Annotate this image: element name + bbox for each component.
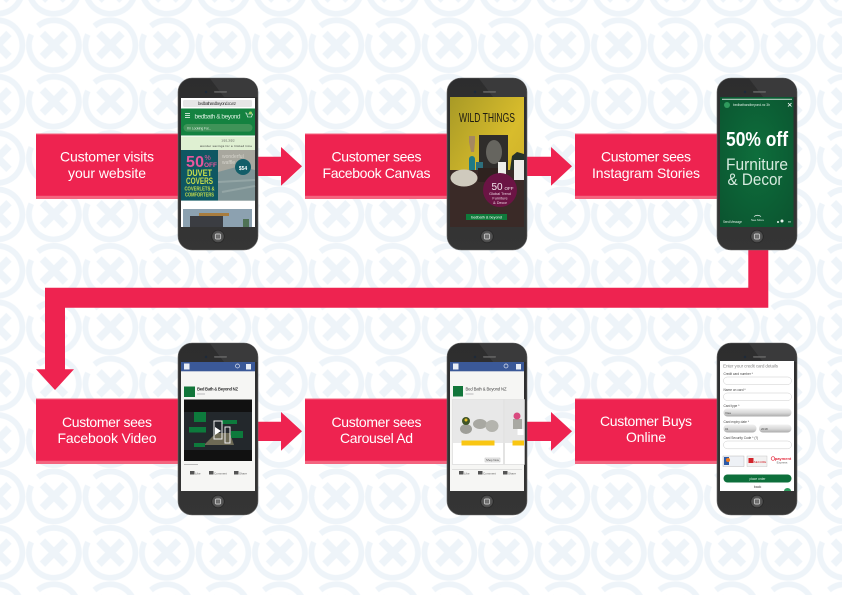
step 5: customer sees Carousel Ad: [305, 343, 572, 515]
phone: Instagram Stories: See More: [751, 218, 764, 222]
phone: Facebook Canvas: bedbath & beyond: [471, 216, 502, 220]
arrow 1: [255, 147, 302, 186]
label box: Customer Buys Online: Online: [626, 429, 666, 445]
phone: checkout form: Visa: [725, 411, 731, 415]
phone: Instagram Stories: 50% off: [726, 129, 788, 151]
phone: Facebook Video: Comment: [214, 472, 227, 476]
phone: website: OFF: [204, 162, 217, 169]
phone: website: wonderful: [222, 154, 244, 160]
label box: Carousel Ad: Carousel Ad: [340, 430, 413, 446]
phone: Facebook Video: [178, 343, 258, 515]
label box: Facebook Canvas: [305, 134, 450, 199]
step 2: customer sees Facebook Canvas: [305, 78, 572, 250]
phone: website: 50: [186, 154, 204, 171]
label box: customer visits your website: your website: [68, 165, 146, 181]
phone: checkout form: Credit card number *: [724, 372, 754, 376]
phone: website: waffle: [222, 160, 235, 166]
phone: website: I'm Looking For...: [187, 126, 211, 130]
phone: checkout form: Enter your credit card details: [723, 364, 779, 368]
phone: website: [178, 78, 258, 250]
phone: Facebook Canvas: WILD THINGS: [459, 110, 515, 125]
label box: Customer Buys Online: [575, 398, 720, 464]
arrow 5: [524, 412, 572, 451]
label box: Carousel Ad: [305, 398, 450, 464]
label box: customer visits your website: Customer visits: [60, 148, 154, 164]
phone: website: %: [204, 155, 211, 162]
label box: Customer Buys Online: Customer Buys: [600, 413, 692, 429]
phone: Facebook Canvas: 50: [491, 182, 503, 193]
phone: checkout form: 01: [725, 427, 729, 431]
phone: Instagram Stories: Furniture: [726, 155, 788, 174]
label box: customer visits your website: [36, 134, 181, 199]
phone: website: wonder savings for a limited time: [200, 144, 252, 148]
phone: Carousel Ad: Comment: [483, 472, 496, 476]
phone: website: COMFORTERS: [185, 192, 214, 198]
label box: Carousel Ad: Customer sees: [332, 414, 422, 430]
phone: website: DUVET: [187, 168, 212, 178]
phone: Carousel Ad: Like: [464, 472, 470, 476]
connector arrow: top row to bottom row: [36, 240, 768, 390]
phone: Facebook Video: Bed Bath & Beyond NZ: [197, 386, 238, 392]
arrow 2: [524, 147, 572, 186]
label box: Facebook Video: Customer sees: [62, 414, 152, 430]
phone: website: 1/1/1,3/2/2: [221, 138, 235, 142]
phone: checkout form: Express: [777, 460, 788, 464]
phone: checkout form: Card expiry date *: [724, 420, 750, 424]
phone: Instagram Stories: & Decor: [728, 170, 783, 189]
phone: website: bedbath & beyond: [194, 113, 241, 120]
phone: checkout form: back: [754, 485, 761, 489]
phone: website: COVERLETS &: [184, 186, 215, 192]
phone: website: bedbathandbeyond.co.nz: [198, 101, 236, 106]
phone: Carousel Ad: Share: [508, 472, 516, 476]
phone: website: $54: [239, 166, 247, 172]
label box: Facebook Video: [36, 398, 181, 464]
phone: checkout form: payment: [775, 456, 792, 461]
phone: checkout form: Name on card *: [724, 388, 746, 392]
phone: Facebook Canvas: [447, 78, 527, 250]
step 6: customer buys online: [575, 343, 797, 515]
phone: checkout form: Card type *: [724, 404, 740, 408]
phone: Facebook Video: Like: [195, 472, 201, 476]
phone: checkout form: Card Security Code * (?): [724, 436, 758, 440]
label box: Instagram Stories: Customer sees: [601, 148, 691, 164]
phone: Instagram Stories: Send Message: [723, 220, 742, 224]
phone: Carousel Ad: [447, 343, 527, 515]
phone: Instagram Stories: bedbathandbeyond.nz 3h: [733, 103, 770, 107]
phone: Facebook Canvas: OFF: [504, 186, 514, 191]
phone: website: COVERS: [186, 176, 213, 186]
phone: Instagram Stories: [717, 78, 797, 250]
label box: Facebook Canvas: Customer sees: [332, 148, 422, 164]
phone: Carousel Ad: Bed Bath & Beyond NZ: [466, 386, 507, 392]
phone: Facebook Canvas: Global Trend: [489, 192, 511, 196]
step 4: customer sees Facebook Video: [36, 343, 302, 515]
label box: Instagram Stories: [575, 134, 720, 199]
phone: checkout form: place order: [750, 477, 766, 481]
phone: Facebook Canvas: & Decor: [493, 201, 508, 205]
label box: Instagram Stories: Instagram Stories: [592, 165, 700, 181]
phone: Facebook Video: Share: [239, 472, 247, 476]
phone: checkout form: SECURE: [754, 460, 766, 464]
step 3: customer sees Instagram Stories: [575, 78, 797, 250]
phone: checkout form: [717, 343, 797, 515]
label box: Facebook Video: Facebook Video: [58, 430, 157, 446]
phone: Facebook Canvas: Furniture: [492, 196, 508, 200]
phone: Carousel Ad: Shop Now: [486, 458, 500, 462]
label box: Facebook Canvas: Facebook Canvas: [322, 165, 430, 181]
arrow 4: [255, 412, 302, 451]
phone: checkout form: 2018: [761, 427, 768, 431]
step 1: customer visits website: [36, 78, 302, 250]
